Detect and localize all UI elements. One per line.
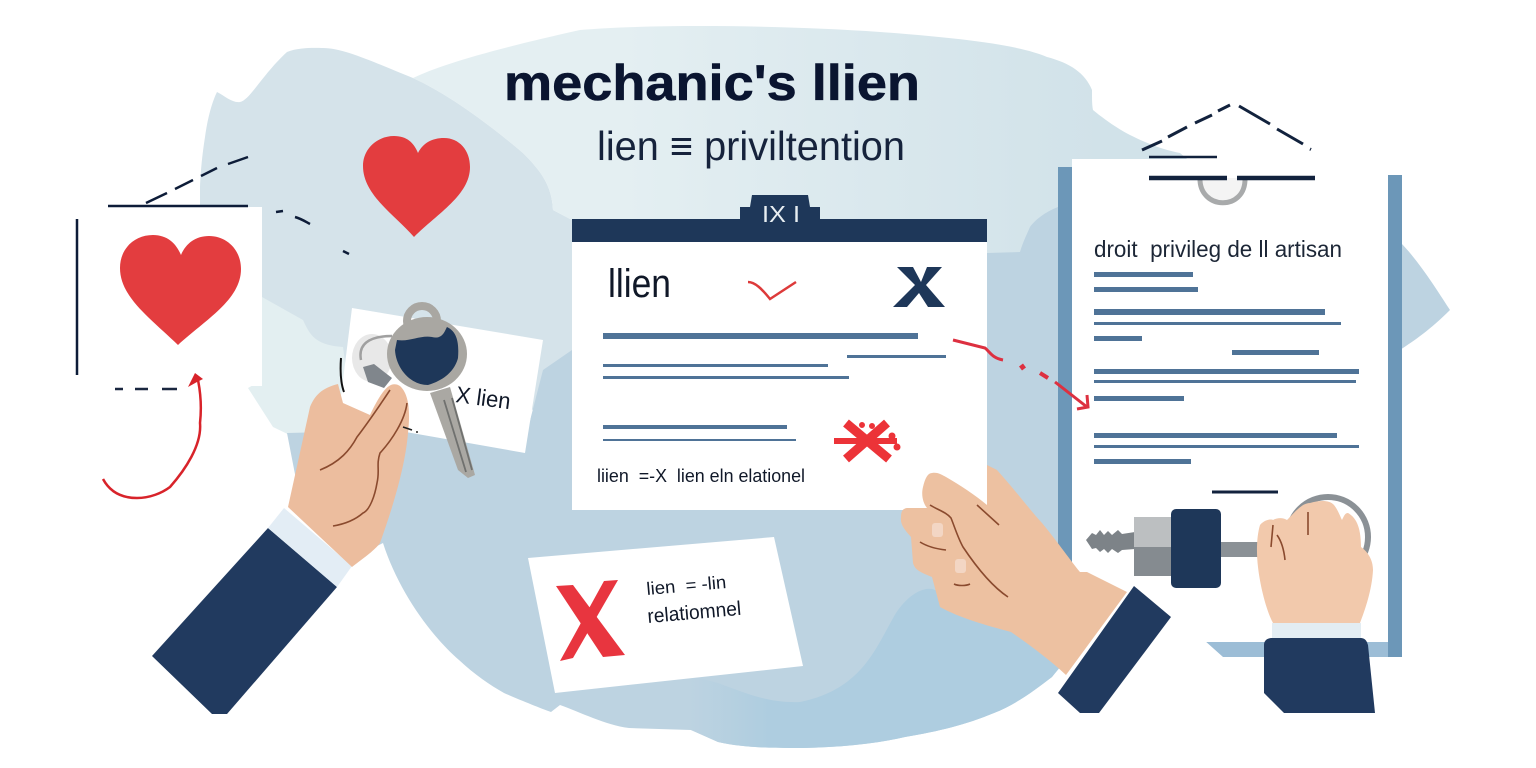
icon: red scribble X <box>834 422 900 459</box>
panel: bottom card: lien = -lin <box>646 572 727 599</box>
panel: note with key <box>338 308 543 453</box>
panel: central document: IX I <box>762 201 800 227</box>
text lines <box>603 333 946 441</box>
panel: heart card <box>77 157 349 498</box>
panel: bottom card <box>528 537 803 693</box>
center right hand <box>901 465 1171 713</box>
icon: bottom key and right hand <box>1086 497 1375 713</box>
heading text: droit privileg de ll artisan <box>1094 236 1342 262</box>
icon: navy X <box>893 267 945 307</box>
icon: clip ring <box>1200 178 1245 203</box>
title: mechanic's llien <box>504 55 920 111</box>
icon: key <box>387 306 475 478</box>
heading: llien: llien <box>608 262 671 306</box>
arrow: dashed red <box>953 340 1088 409</box>
panel: bottom card: relatiomnel <box>647 598 742 628</box>
icon: red check <box>748 282 796 299</box>
icon: heart <box>120 235 241 345</box>
subtitle: lien ≡ priviltention <box>597 123 905 169</box>
icon: floating heart <box>363 136 470 237</box>
house roof dashed <box>1142 105 1311 150</box>
left hand <box>152 384 418 714</box>
panel: note with key: X lien <box>454 381 512 414</box>
background blob <box>200 26 1450 748</box>
panel: central document: liien =-X lien eln elationel <box>597 466 805 486</box>
panel: right document <box>1058 105 1402 657</box>
panel: central document <box>572 195 987 510</box>
icon: big red X <box>556 580 625 661</box>
arrow: red curved <box>103 380 201 498</box>
